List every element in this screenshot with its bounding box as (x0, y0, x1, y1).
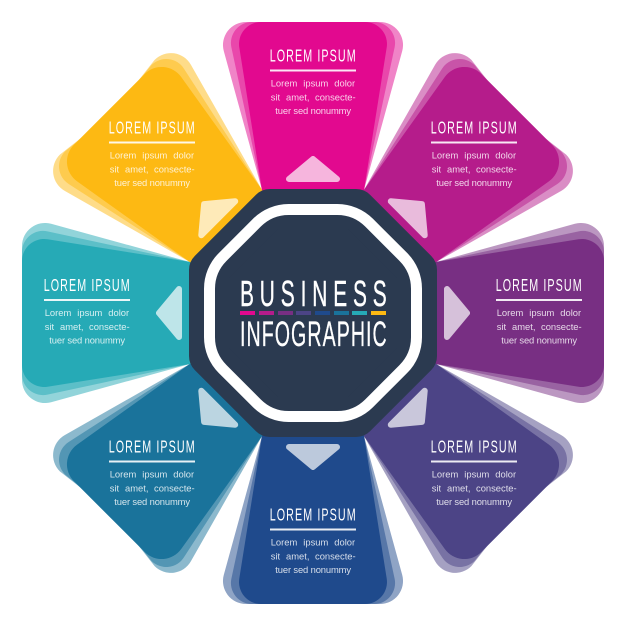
text block: right: Lorem (497, 307, 526, 318)
text block: bottom left: amet, (125, 482, 151, 493)
text block: top left: amet, (125, 163, 151, 174)
title: BUSINESS: BUSINESS (240, 274, 387, 315)
text block: top: amet, (286, 91, 312, 102)
text block: left: consecte- (89, 321, 130, 332)
text block: top: sit (271, 91, 283, 102)
title colour dashes (240, 311, 386, 315)
text block: top right: amet, (447, 163, 473, 174)
text block: bottom left: ipsum (142, 468, 170, 480)
text block: bottom (270, 506, 356, 575)
text block: top left: LOREM IPSUM (109, 119, 195, 139)
text block: top left: ipsum (142, 150, 170, 160)
text block: bottom right: sit (432, 482, 444, 493)
text block: bottom: Lorem (271, 536, 300, 548)
petal: yellow top left (44, 44, 377, 377)
text block: right: tuer sed nonummy (501, 334, 577, 346)
text block: bottom left: Lorem (110, 468, 139, 480)
text block: right: dolor (560, 307, 581, 318)
text block: bottom left: LOREM IPSUM (109, 438, 195, 458)
text block: left: amet, (60, 321, 86, 332)
text block: top right: LOREM IPSUM (431, 119, 517, 139)
text block: top right: ipsum (464, 150, 492, 160)
text block: left: tuer sed nonummy (49, 334, 125, 346)
text block: bottom: dolor (334, 536, 355, 548)
text block: top right: tuer sed nonummy (436, 177, 512, 188)
text block: top right: Lorem (432, 150, 461, 160)
text block: left: LOREM IPSUM (44, 277, 130, 296)
petal: purple right (313, 223, 604, 403)
text block: right: consecte- (541, 321, 582, 332)
text block: top left: dolor (173, 150, 194, 160)
text block: bottom: LOREM IPSUM (270, 506, 356, 526)
petal: magenta top (223, 22, 403, 313)
petal: navy blue bottom (223, 313, 403, 604)
text block: top left: tuer sed nonummy (114, 177, 190, 188)
text block: bottom right: Lorem (432, 468, 461, 480)
text block: bottom: consecte- (315, 550, 356, 561)
text block: top left (109, 119, 195, 188)
petal: steel teal bottom left (44, 249, 377, 582)
text block: bottom: sit (271, 550, 283, 561)
text block: top right: sit (432, 163, 444, 174)
text block: bottom right: amet, (447, 482, 473, 493)
text block: left: sit (45, 321, 57, 332)
text block: bottom right (431, 438, 517, 507)
text block: bottom: amet, (286, 550, 312, 561)
text block: bottom left: sit (110, 482, 122, 493)
text block: left: Lorem (45, 307, 74, 318)
petal: indigo bottom right (249, 249, 582, 582)
text block: bottom right: ipsum (464, 468, 492, 480)
text block: left: dolor (108, 307, 129, 318)
text block: top (270, 47, 356, 116)
text block: top left: sit (110, 163, 122, 174)
text block: bottom left (109, 438, 195, 507)
text block: right: LOREM IPSUM (496, 277, 582, 296)
text block: right: sit (497, 321, 509, 332)
text block: bottom right: consecte- (476, 482, 517, 493)
text block: bottom right: dolor (495, 468, 516, 480)
text block: bottom left: dolor (173, 468, 194, 480)
text block: top left: Lorem (110, 150, 139, 160)
central octagon (209, 209, 417, 417)
text block: bottom left: tuer sed nonummy (114, 496, 190, 507)
text block: bottom: tuer sed nonummy (275, 564, 351, 575)
title: INFOGRAPHIC: INFOGRAPHIC (240, 315, 387, 355)
text block: bottom right: tuer sed nonummy (436, 496, 512, 507)
text block: bottom left: consecte- (154, 482, 195, 493)
text block: top: consecte- (315, 91, 356, 102)
text block: top: LOREM IPSUM (270, 47, 356, 67)
text block: top: ipsum (303, 78, 331, 88)
text block: top: tuer sed nonummy (275, 105, 351, 116)
text block: top left: consecte- (154, 163, 195, 174)
text block: top: dolor (334, 78, 355, 88)
text block: left (44, 277, 130, 346)
petal: teal left (22, 223, 313, 403)
text block: top right (431, 119, 517, 188)
text block: bottom: ipsum (303, 536, 331, 548)
text block: top right: consecte- (476, 163, 517, 174)
text block: left: ipsum (77, 307, 105, 318)
text block: right (496, 277, 582, 346)
text block: right: amet, (512, 321, 538, 332)
text block: top right: dolor (495, 150, 516, 160)
text block: bottom right: LOREM IPSUM (431, 438, 517, 458)
text block: top: Lorem (271, 78, 300, 88)
petal: purple-magenta top right (249, 44, 582, 377)
text block: right: ipsum (529, 307, 557, 318)
